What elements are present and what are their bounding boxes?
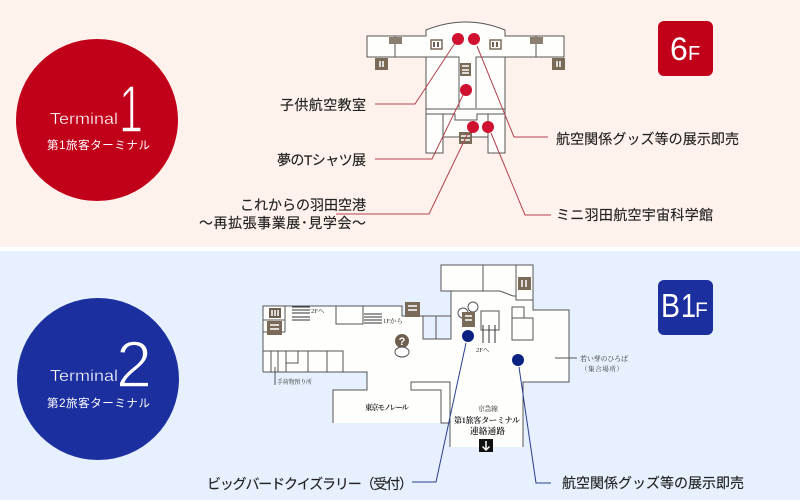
label: future of Haneda [199,197,366,231]
terminal 2 badge [17,298,179,460]
floor map B1F: 若い芽のひろば [580,354,628,363]
marker dots terminal 1 [452,33,494,133]
floor map B1F: （集合場所） [581,364,623,373]
floor badge 6F: F [688,43,700,65]
label: future of Haneda: これからの羽田空港 [240,197,366,213]
floor badge B1F: 1 [681,287,696,324]
floor map B1F: 連絡通路 [470,425,505,436]
label: dream T-shirt exhibition: 夢のTシャツ展 [277,152,366,168]
icon: information: ? [399,336,406,348]
terminal 2 badge: Terminal [50,368,118,385]
floor map B1F: 手荷物預り所 [277,378,312,386]
floor map B1F: 京急線 [478,404,498,413]
floor map B1F: 2Fへ [476,347,490,354]
label: aviation goods T2: 航空関係グッズ等の展示即売 [562,475,744,491]
label: kids aviation classroom: 子供航空教室 [280,97,366,113]
floor map B1F: 第1旅客ターミナル [454,415,520,425]
icon: information [395,334,409,357]
terminal 2 badge: 第2旅客ターミナル [47,396,150,410]
floor map B1F: 東京モノレール [365,402,410,412]
panel: terminal 1 background [0,0,800,247]
terminal 1 badge: 1 [119,72,143,147]
panel: terminal 2 background [0,251,800,500]
icon: restrooms 6F [375,37,565,144]
label: mini museum: ミニ羽田航空宇宙科学館 [556,207,713,223]
label: big bird quiz rally: ビッグバードクイズラリー（受付） [207,476,413,492]
terminal 1 badge [16,39,178,201]
floor badge B1F: B [661,287,680,324]
stair marks [292,307,495,343]
terminal 2 badge: 2 [116,327,152,401]
terminal 1 badge: 第1旅客ターミナル [47,138,150,152]
floor map B1F [263,265,628,452]
leader lines terminal 2 [412,343,551,483]
label: aviation goods: 航空関係グッズ等の展示即売 [556,131,739,147]
floor badge 6F: 6 [670,31,688,67]
icon: B1F facilities [267,277,531,335]
floor map B1F: 1Fから [383,317,403,325]
floor badge 6F [658,21,713,76]
icon: down arrow [479,439,493,452]
marker dots terminal 2 [462,330,524,366]
label: future of Haneda: ～再拡張事業展･見学会～ [199,215,366,231]
leader lines terminal 1 [336,43,551,215]
floor badge B1F [658,280,713,335]
floor map 6F [367,22,565,153]
floor map B1F: 2Fへ [311,308,325,315]
floor badge B1F: F [695,299,708,322]
terminal 1 badge: Terminal [50,111,118,128]
